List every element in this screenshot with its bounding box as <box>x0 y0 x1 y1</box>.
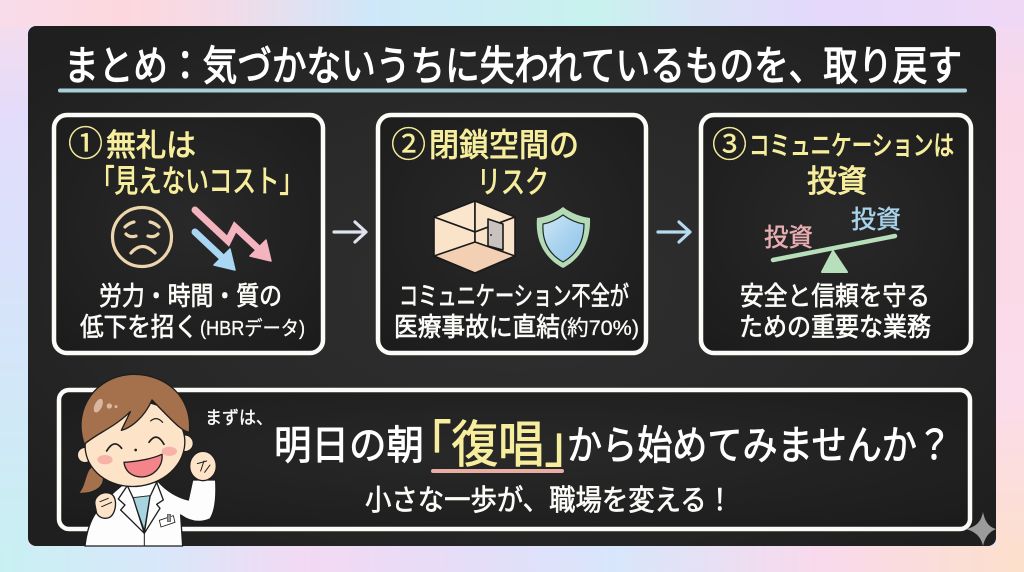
lab coat <box>85 480 216 546</box>
body text: investment <box>739 276 931 344</box>
panel: communication is investment <box>701 115 971 353</box>
body text: closed space risk: (約70%) <box>560 317 639 340</box>
panel: closed space risk <box>378 115 646 353</box>
icon: balance scale <box>764 200 901 272</box>
body text: invisible cost: (HBRデータ) <box>200 317 305 340</box>
body text: closed space risk: コミュニケーション不全が <box>399 276 629 313</box>
body text: invisible cost: 労力・時間・質の <box>99 276 282 313</box>
arrow: panel 2 to 3 <box>658 222 690 242</box>
body text: investment: ための重要な業務 <box>739 307 931 344</box>
icon: shield <box>537 207 590 268</box>
heading: investment <box>712 117 954 201</box>
heading: closed space risk: ② <box>391 117 426 168</box>
main message: 明日の朝 <box>274 413 424 471</box>
main message: から始めてみませんか？ <box>567 413 952 471</box>
heading: invisible cost <box>68 116 303 201</box>
face <box>80 395 190 493</box>
arrow: panel 1 to 2 <box>334 222 366 242</box>
body text: closed space risk: 医療事故に直結 <box>394 307 560 344</box>
heading: closed space risk <box>391 117 579 202</box>
facial features <box>97 419 177 477</box>
ponytail <box>78 467 103 493</box>
heading: investment: 投資 <box>807 156 867 201</box>
icon: closed room <box>434 201 515 273</box>
highlight underline <box>431 469 564 473</box>
shirt <box>133 496 150 530</box>
title underline <box>58 88 967 92</box>
heading: investment: コミュニケーションは <box>749 124 954 163</box>
body text: invisible cost: 低下を招く <box>80 307 198 344</box>
icon: balance scale: 投資 <box>851 200 901 236</box>
panel: invisible cost <box>54 115 323 353</box>
icon: sparkle <box>966 512 996 546</box>
small lead text: まずは、 <box>205 404 273 430</box>
ears <box>77 447 93 463</box>
heading: invisible cost: 「見えないコスト」 <box>91 156 303 201</box>
heading: closed space risk: リスク <box>477 157 549 202</box>
heading: closed space risk: 閉鎖空間の <box>429 120 579 166</box>
body text: invisible cost <box>80 276 305 344</box>
hair <box>81 374 190 444</box>
lower fist <box>95 493 116 518</box>
heading: invisible cost: 無礼は <box>106 120 196 165</box>
main message: 「復唱」 <box>405 405 591 477</box>
sub message: 小さな一歩が、職場を変える！ <box>365 477 733 519</box>
heading: invisible cost: ① <box>68 116 103 167</box>
panel: call to action <box>59 390 970 529</box>
icon: falling arrows <box>195 210 271 270</box>
raised fist <box>190 451 216 481</box>
heading: investment: ③ <box>712 117 747 168</box>
icon: balance scale: 投資 <box>764 218 813 254</box>
character: doctor <box>77 374 216 546</box>
coat lapels <box>118 486 144 533</box>
body text: closed space risk <box>394 276 639 344</box>
icon: sad face <box>112 208 172 266</box>
name badge <box>159 516 175 527</box>
body text: investment: 安全と信頼を守る <box>740 276 930 313</box>
main message <box>274 405 952 477</box>
